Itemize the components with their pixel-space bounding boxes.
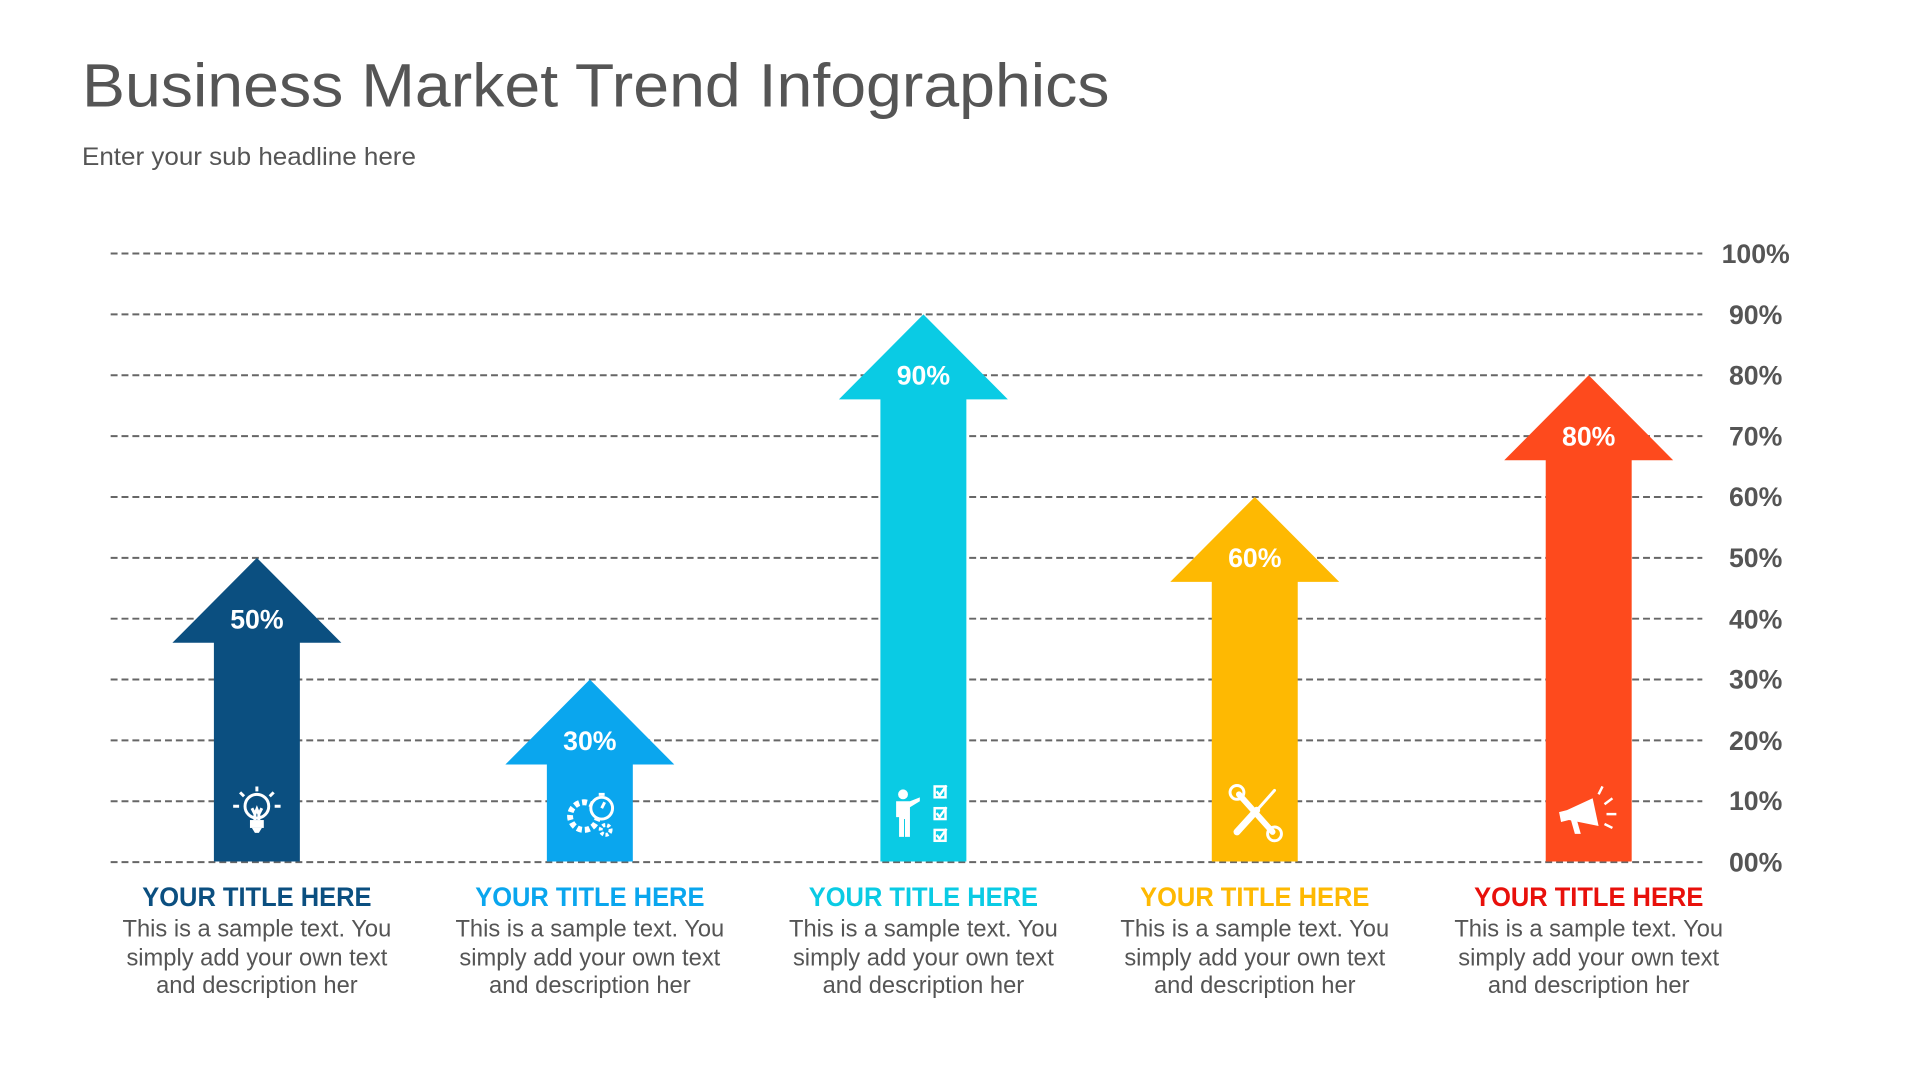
column 4 text: and description her [1154,973,1356,999]
icon: megaphone [1559,786,1616,834]
arrow 2: 30% [505,680,674,862]
axis labels: 10% [1729,786,1782,816]
arrow 1: 50% [172,558,341,862]
axis labels: 20% [1729,726,1782,756]
column 3 text: and description her [823,973,1024,999]
axis labels: 60% [1729,482,1782,512]
icon: lightbulb [233,786,281,833]
arrow 3: 90%: 90% [897,360,950,390]
column 4 text: This is a sample text. You [1120,917,1389,943]
column 4 text: YOUR TITLE HERE [1140,882,1369,912]
column 1 text: and description her [156,973,358,999]
axis labels: 00% [1729,847,1782,877]
column 5 text: simply add your own text [1458,945,1720,971]
arrow 5: 80%: 80% [1562,422,1615,452]
arrow 1: 50%: 50% [230,604,284,634]
column 1 text [122,882,391,999]
column 5 text: YOUR TITLE HERE [1474,882,1703,912]
arrow 4: 60%: 60% [1228,543,1281,573]
title: Business Market Trend Infographics [82,52,1110,120]
column 1 text: YOUR TITLE HERE [142,882,371,912]
icon: gears and stopwatch [570,794,613,835]
axis labels: 100% [1722,239,1790,269]
axis labels [1722,239,1790,877]
column 5 text: and description her [1488,973,1690,999]
column 2 text: simply add your own text [459,945,721,971]
axis labels: 30% [1729,665,1782,695]
column 3 text: simply add your own text [793,945,1054,971]
subtitle: Enter your sub headline here [82,144,416,171]
column 2 text [455,882,724,999]
column 1 text: This is a sample text. You [122,917,391,943]
column 3 text: This is a sample text. You [789,917,1058,943]
column 5 text: This is a sample text. You [1454,917,1723,943]
icon: wrench and screwdriver [1230,785,1281,841]
column 2 text: and description her [489,973,691,999]
axis labels: 40% [1729,604,1782,634]
column 3 text [789,882,1058,999]
arrow 4: 60% [1170,497,1339,862]
axis labels: 70% [1729,422,1782,452]
column 1 text: simply add your own text [126,945,388,971]
column 3 text: YOUR TITLE HERE [809,882,1038,912]
axis labels: 90% [1729,300,1782,330]
column 2 text: This is a sample text. You [455,917,724,943]
axis labels: 50% [1729,543,1782,573]
arrow 2: 30%: 30% [563,726,617,756]
column 4 text [1120,882,1389,999]
column 2 text: YOUR TITLE HERE [475,882,704,912]
axis labels: 80% [1729,360,1782,390]
column 5 text [1454,882,1723,999]
infographic content [82,52,1790,999]
column 4 text: simply add your own text [1124,945,1386,971]
arrow 3: 90% [839,314,1008,862]
icon: presenter with checklist [896,785,947,841]
arrow 5: 80% [1504,375,1673,862]
